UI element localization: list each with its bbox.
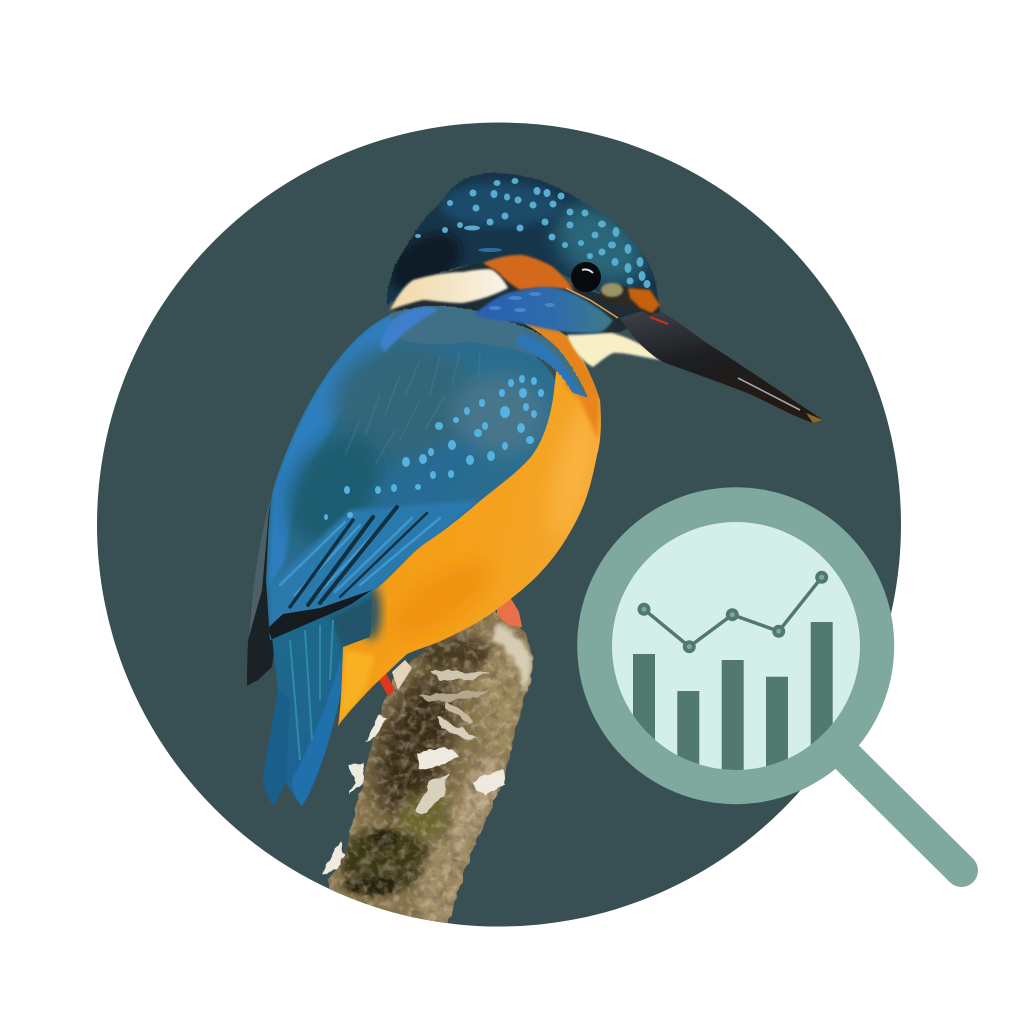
wing spots xyxy=(324,375,544,520)
orange chest strip xyxy=(523,323,600,400)
eye xyxy=(571,262,601,292)
dark under-feathers xyxy=(247,500,285,686)
face base xyxy=(390,262,660,335)
red beak base line xyxy=(650,317,668,324)
tail xyxy=(263,590,375,806)
lore patch xyxy=(600,283,660,315)
line chart xyxy=(638,571,828,653)
moustache flecks xyxy=(489,292,555,312)
head cap xyxy=(378,173,660,312)
beak xyxy=(620,310,823,423)
blue moustache xyxy=(473,287,613,333)
mantle fur on wing xyxy=(345,352,480,465)
orange eye rim xyxy=(566,288,618,318)
kingfisher on a reed xyxy=(247,173,823,937)
orange belly xyxy=(338,335,611,726)
handle xyxy=(845,755,962,870)
white neck patch xyxy=(390,269,508,310)
feet xyxy=(378,597,522,696)
lens face xyxy=(612,522,860,770)
background circle xyxy=(97,122,901,926)
orange eye stripe xyxy=(483,255,574,290)
beak tip xyxy=(806,413,823,423)
head spots xyxy=(415,178,650,288)
magnifying glass with chart xyxy=(577,487,962,870)
reed stump xyxy=(322,611,534,924)
lens ring xyxy=(577,487,894,804)
white throat xyxy=(567,333,662,367)
wing xyxy=(266,310,555,640)
reed fibres xyxy=(322,672,504,874)
bar chart xyxy=(633,622,833,784)
beak highlight xyxy=(738,378,800,410)
neck mantle xyxy=(380,306,588,398)
illustration: kingfisher and magnifier xyxy=(97,122,978,926)
